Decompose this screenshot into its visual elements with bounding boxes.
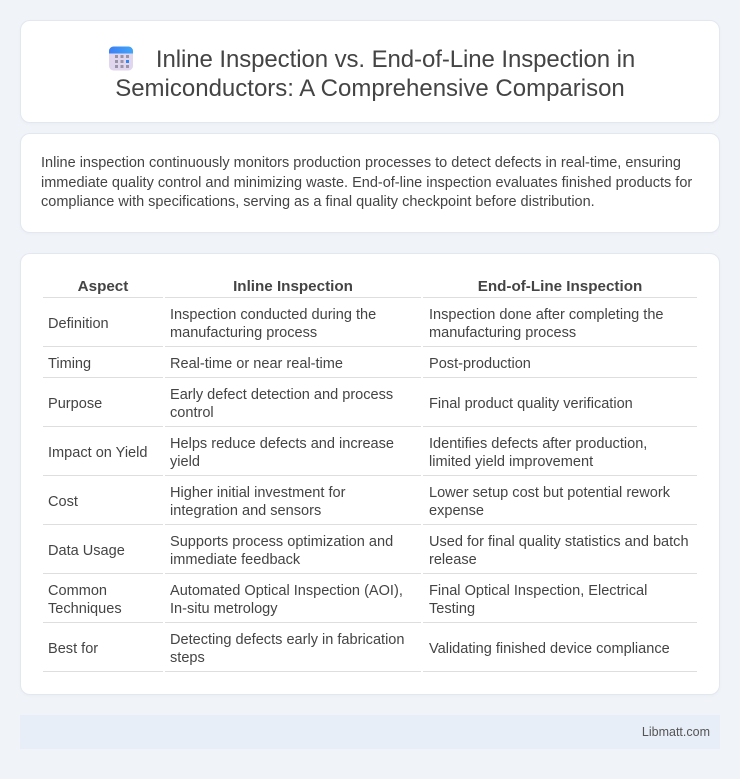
table: comparison: Purpose — [48, 396, 102, 412]
table: comparison: Used for final quality statistics and batch — [429, 534, 689, 550]
icon: calendar grid — [109, 46, 133, 70]
text: introduction: immediate quality control and minimizing waste. End-of-line inspection evaluates finished products for — [41, 174, 692, 190]
table: comparison: Identifies defects after production, — [429, 436, 647, 452]
header: End-of-Line Inspection: End-of-Line Inspection — [478, 278, 642, 295]
table: comparison: Definition — [48, 316, 109, 332]
table: comparison: Inspection conducted during the — [170, 307, 376, 323]
table: comparison: release — [429, 552, 477, 568]
panel: title card — [20, 20, 720, 123]
table: comparison: In-situ metrology — [170, 601, 278, 617]
row: Best for — [48, 632, 670, 666]
row: Data Usage — [48, 534, 689, 568]
table: comparison — [43, 278, 697, 672]
table: comparison: Lower setup cost but potential rework — [429, 485, 670, 501]
table: comparison: steps — [170, 650, 205, 666]
table: comparison: Higher initial investment for — [170, 485, 345, 501]
table: comparison: Impact on Yield — [48, 445, 147, 461]
footer bar — [20, 715, 720, 749]
text: introduction: Inline inspection continuously monitors production processes to detect defects in real-time, ensuring — [41, 155, 681, 171]
table: comparison: Post-production — [429, 356, 531, 372]
table: comparison: Real-time or near real-time — [170, 356, 343, 372]
text: introduction: compliance with specifications, serving as a final quality checkpoint before distribution. — [41, 194, 595, 210]
table: comparison: Inspection done after completing the — [429, 307, 664, 323]
table: comparison: Cost — [48, 494, 78, 510]
table: comparison: limited yield improvement — [429, 454, 593, 470]
table: comparison: Validating finished device compliance — [429, 641, 670, 657]
table: comparison: Automated Optical Inspection (AOI), — [170, 583, 403, 599]
table: comparison: control — [170, 405, 214, 421]
heading: title: Semiconductors: A Comprehensive Comparison — [115, 75, 625, 102]
row: Impact on Yield — [48, 436, 647, 470]
table: comparison: Final product quality verification — [429, 396, 633, 412]
row: Common Techniques — [48, 583, 647, 617]
table: comparison: Common — [48, 583, 107, 599]
table: comparison: yield — [170, 454, 200, 470]
header: Inline Inspection: Inline Inspection — [233, 278, 353, 295]
table: comparison: manufacturing process — [170, 325, 317, 341]
row: Cost — [48, 485, 670, 519]
table: comparison: expense — [429, 503, 484, 519]
table: comparison: Data Usage — [48, 543, 125, 559]
panel: intro card — [20, 133, 720, 233]
table: comparison: integration and sensors — [170, 503, 321, 519]
table: comparison: Detecting defects early in fabrication — [170, 632, 404, 648]
table: comparison: Supports process optimization and — [170, 534, 393, 550]
heading: title — [115, 46, 635, 102]
table: comparison: Techniques — [48, 601, 122, 617]
table: comparison: Timing — [48, 356, 91, 372]
header: Aspect: Aspect — [78, 278, 128, 295]
table: comparison: immediate feedback — [170, 552, 300, 568]
table: comparison: Best for — [48, 641, 98, 657]
table: comparison: Early defect detection and process — [170, 387, 393, 403]
table: comparison: Final Optical Inspection, Electrical — [429, 583, 647, 599]
text: footer credit: Libmatt.com — [642, 725, 710, 739]
table: comparison: Helps reduce defects and increase — [170, 436, 394, 452]
row: Purpose — [48, 387, 633, 421]
panel: comparison table card — [20, 253, 720, 695]
text: introduction — [41, 155, 692, 210]
row: Definition — [48, 307, 664, 341]
heading: title: Inline Inspection vs. End-of-Line Inspection in — [156, 46, 635, 73]
table: comparison: Testing — [429, 601, 475, 617]
row: Timing — [48, 356, 531, 372]
table: comparison: manufacturing process — [429, 325, 576, 341]
